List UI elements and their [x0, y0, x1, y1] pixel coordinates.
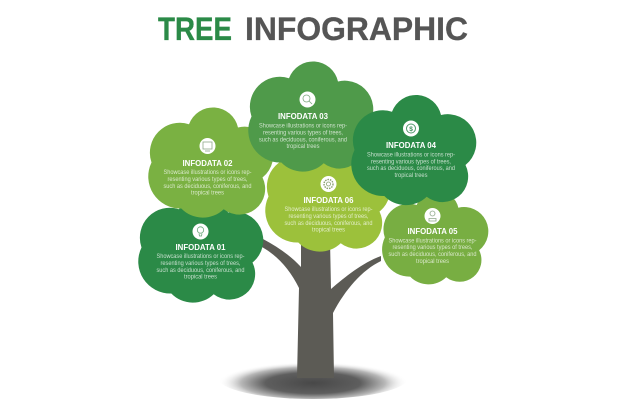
- panel: infodata 04: [351, 95, 476, 205]
- panel: infodata 05: resenting various types of trees,: [392, 245, 473, 251]
- icon: light bulb: [192, 224, 208, 240]
- title: TREE: [158, 11, 232, 47]
- panel: infodata 04: tropical trees: [394, 173, 428, 179]
- panel: infodata 05: INFODATA 05: [408, 226, 458, 236]
- panel: infodata 04: Showcase illustrations or icons rep-: [367, 152, 455, 158]
- panel: infodata 06: [265, 141, 390, 252]
- panel: infodata 04: INFODATA 04: [386, 140, 436, 150]
- panel: infodata 05: such as deciduous, coniferous, and: [388, 252, 476, 258]
- panel: infodata 01: [138, 192, 263, 303]
- panel: infodata 02: such as deciduous, coniferous, and: [164, 184, 252, 190]
- ground shadow: [218, 357, 408, 399]
- panel: infodata 02: INFODATA 02: [182, 158, 233, 168]
- panel: infodata 05: tropical trees: [416, 259, 449, 265]
- title: INFOGRAPHIC: [245, 11, 468, 47]
- panel: infodata 04: resenting various types of trees,: [371, 160, 451, 166]
- panel: infodata 02: [148, 107, 273, 218]
- panel: infodata 01: tropical trees: [184, 274, 217, 280]
- panel: infodata 02: tropical trees: [191, 190, 224, 196]
- panel: infodata 03: INFODATA 03: [278, 111, 328, 121]
- icon: gear: [320, 176, 336, 192]
- panel: infodata 03: [248, 61, 373, 172]
- panel: infodata 01: resenting various types of trees,: [160, 261, 241, 267]
- tree trunk and branches: [262, 239, 381, 378]
- panel: infodata 05: [382, 191, 488, 284]
- icon: magnifier: [300, 92, 316, 108]
- panel: infodata 01: such as deciduous, coniferous, and: [156, 268, 244, 274]
- panel: infodata 03: tropical trees: [286, 144, 320, 150]
- panel: infodata 02: Showcase illustrations or icons rep-: [164, 170, 252, 176]
- icon: monitor: [200, 138, 216, 154]
- icon: dollar coin: $: [409, 126, 413, 133]
- panel: infodata 06: INFODATA 06: [304, 195, 354, 205]
- panel: infodata 04: such as deciduous, coniferous, and: [367, 166, 455, 172]
- panel: infodata 02: resenting various types of trees,: [168, 177, 248, 183]
- panel: infodata 03: such as deciduous, coniferous, and: [259, 138, 347, 144]
- panel: infodata 03: resenting various types of trees,: [263, 130, 343, 136]
- panel: infodata 01: Showcase illustrations or icons rep-: [156, 254, 245, 260]
- panel: infodata 05: Showcase illustrations or icons rep-: [388, 238, 477, 244]
- panel: infodata 06: resenting various types of trees,: [288, 214, 369, 220]
- panel: infodata 06: tropical trees: [312, 228, 345, 234]
- panel: infodata 06: such as deciduous, coniferous, and: [284, 221, 372, 227]
- panel: infodata 06: Showcase illustrations or icons rep-: [284, 207, 373, 213]
- panel: infodata 01: INFODATA 01: [176, 242, 226, 252]
- panel: infodata 03: Showcase illustrations or icons rep-: [259, 124, 347, 130]
- icon: person: [424, 208, 440, 224]
